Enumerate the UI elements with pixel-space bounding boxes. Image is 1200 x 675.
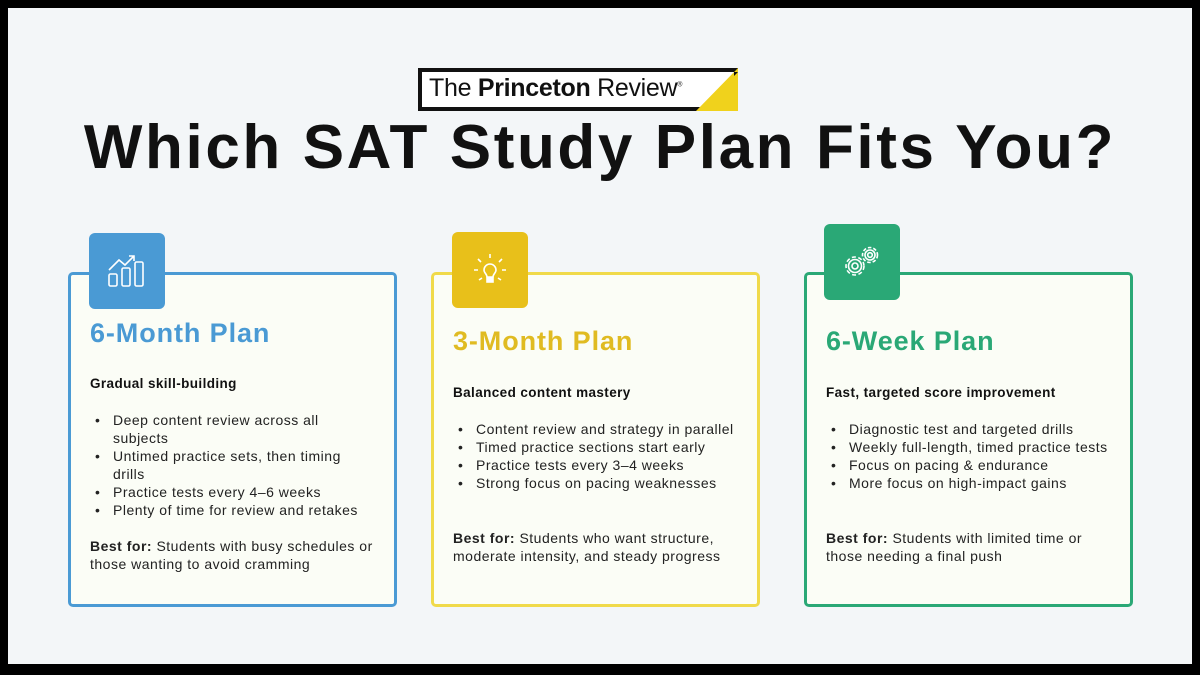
title: Which SAT Study Plan Fits You? xyxy=(84,113,1116,182)
bullet list: Weekly full-length, timed practice tests xyxy=(849,439,1108,455)
best for: Best for: Students who want structure, moderate intensity, and steady progress xyxy=(453,530,720,564)
bullet list: Strong focus on pacing weaknesses xyxy=(476,475,717,491)
bullet list xyxy=(832,421,1108,491)
best for: Best for: Students with limited time or those needing a final push xyxy=(826,530,1082,564)
panel: 6-month plan xyxy=(68,272,397,607)
bullet list: Practice tests every 3–4 weeks xyxy=(476,457,684,473)
heading: 3-Month Plan xyxy=(453,326,633,356)
heading: 6-Month Plan xyxy=(90,318,270,348)
icon: gears xyxy=(824,224,900,300)
bullet list: Diagnostic test and targeted drills xyxy=(849,421,1074,437)
icon: lightbulb xyxy=(452,232,528,308)
bullet list xyxy=(458,421,734,491)
panel: 6-week plan xyxy=(804,272,1133,607)
bullet list xyxy=(96,412,358,518)
bullet list: More focus on high-impact gains xyxy=(849,475,1067,491)
panel: 3-month plan xyxy=(431,272,760,607)
bullet list: Plenty of time for review and retakes xyxy=(113,502,358,518)
bullet list: Practice tests every 4–6 weeks xyxy=(113,484,321,500)
bullet list: Content review and strategy in parallel xyxy=(476,421,734,437)
heading: 6-Week Plan xyxy=(826,326,994,356)
bullet list: Focus on pacing & endurance xyxy=(849,457,1049,473)
bullet list: Deep content review across all subjects xyxy=(113,412,319,446)
icon: chart xyxy=(89,233,165,309)
logo xyxy=(418,68,738,111)
bullet list: Timed practice sections start early xyxy=(476,439,705,455)
subheading: Balanced content mastery xyxy=(453,385,631,400)
logo: The Princeton Review® xyxy=(429,74,682,102)
subheading: Fast, targeted score improvement xyxy=(826,385,1056,400)
best for: Best for: Students with busy schedules or those wanting to avoid cramming xyxy=(90,538,373,572)
bullet list: Untimed practice sets, then timing drills xyxy=(113,448,341,482)
subheading: Gradual skill-building xyxy=(90,376,237,391)
